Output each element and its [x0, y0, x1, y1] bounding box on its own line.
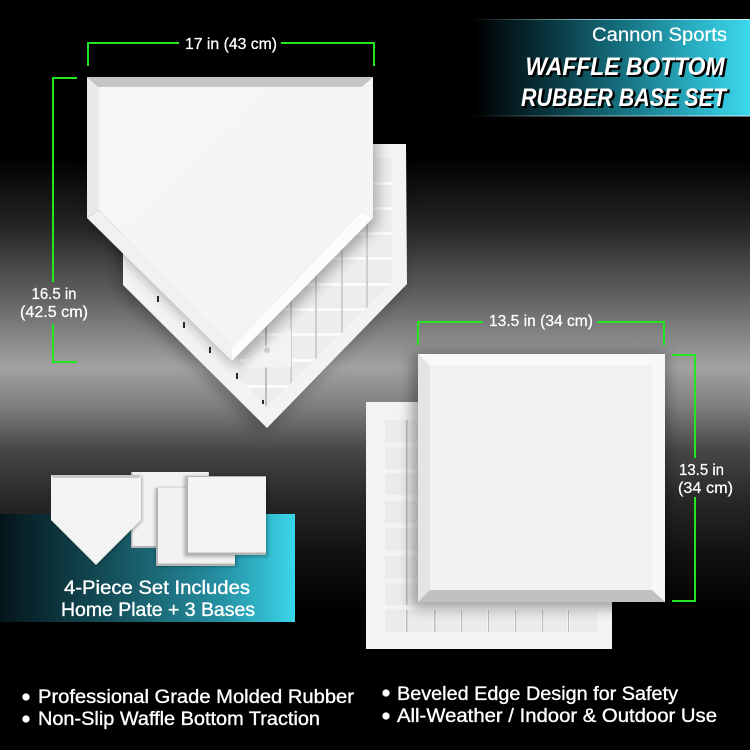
brand name: Cannon Sports	[592, 25, 727, 46]
title	[521, 53, 730, 114]
dimension: home plate height	[20, 78, 88, 362]
title: WAFFLE BOTTOM	[528, 54, 728, 82]
dimension: base height: 13.5 in	[679, 462, 724, 479]
set caption: 4-Piece Set Includes	[64, 578, 250, 599]
panel: set contents	[0, 472, 295, 622]
home plate icon	[51, 475, 142, 566]
dimension: home plate width	[88, 36, 374, 66]
dimension: base height	[672, 355, 733, 601]
feature list left: Non-Slip Waffle Bottom Traction	[38, 709, 320, 730]
dimension: base width	[418, 313, 664, 345]
base icon middle	[155, 488, 237, 567]
home plate waffle back	[119, 144, 407, 434]
base front	[412, 354, 667, 608]
feature list right: All-Weather / Indoor & Outdoor Use	[397, 706, 717, 727]
header banner	[430, 19, 750, 116]
base waffle back	[366, 402, 612, 649]
dimension: home plate height: 16.5 in	[32, 286, 76, 303]
base icon back	[131, 472, 209, 548]
home plate front	[87, 77, 377, 367]
dimension: base width: 13.5 in (34 cm)	[489, 313, 593, 330]
title: WAFFLE BOTTOM	[526, 53, 726, 81]
dimension: home plate height: (42.5 cm)	[20, 304, 88, 321]
dimension: home plate width: 17 in (43 cm)	[185, 36, 277, 53]
hole tab	[239, 330, 291, 368]
feature list left: Professional Grade Molded Rubber	[38, 687, 355, 708]
base icon front	[184, 476, 268, 557]
panel: set contents: Home Plate + 3 Bases	[61, 600, 255, 621]
feature list right	[382, 684, 717, 727]
feature list left	[22, 687, 355, 730]
feature list right: Beveled Edge Design for Safety	[397, 684, 679, 705]
dimension: base height: (34 cm)	[678, 480, 733, 497]
